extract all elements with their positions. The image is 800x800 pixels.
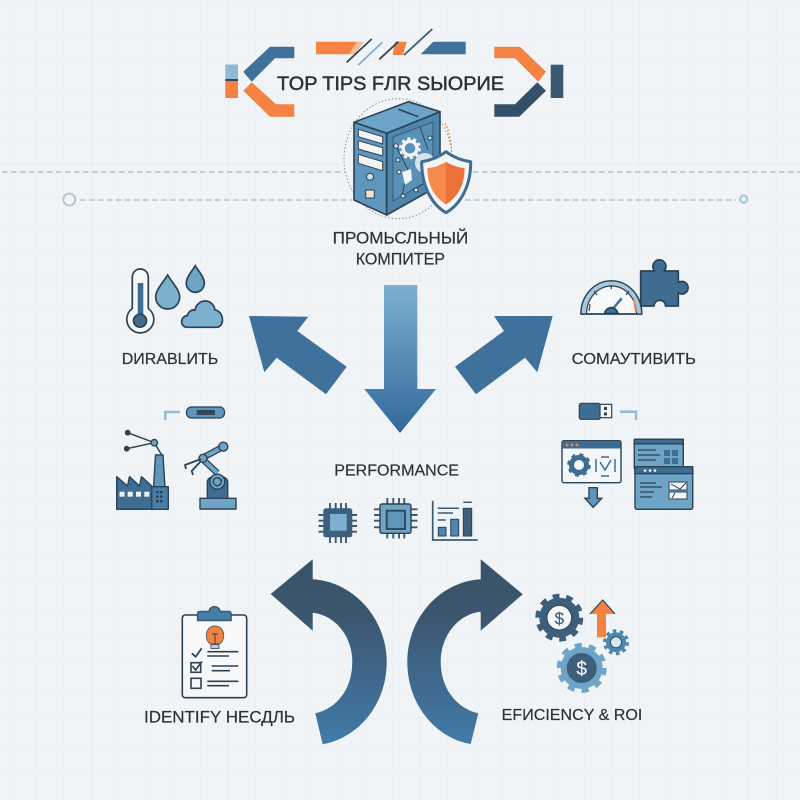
left end bar — [225, 64, 238, 98]
arrow: curved left — [271, 559, 387, 744]
title text: TOP TIPS FЛR SЫОРИЕ — [277, 73, 504, 95]
icon: factory — [117, 430, 168, 509]
icon: thermometer, drops and cloud — [127, 266, 222, 333]
cloud — [182, 301, 222, 327]
top slashes and bars — [316, 29, 466, 65]
left bracket — [243, 47, 294, 117]
icon: processor chip light — [374, 498, 418, 538]
icon: robot arm — [185, 442, 236, 509]
label: efficiency and ROI: EFИCIENCY & ROI — [502, 707, 642, 724]
label: industrial computer: ПРОМЬСЛЬНЫЙ — [333, 228, 468, 247]
title banner — [225, 29, 563, 117]
dashed connector lines — [2, 172, 800, 206]
shield — [422, 152, 471, 213]
circuit panel — [393, 122, 435, 201]
label: industrial computer: КОМПИТЕР — [356, 249, 445, 268]
arrow: curved right — [407, 559, 523, 744]
thermometer — [127, 269, 154, 333]
arrow: up right — [455, 316, 553, 394]
icon: software windows — [562, 439, 693, 509]
icon: gauge and puzzle piece — [581, 260, 688, 314]
download arrow — [585, 488, 602, 507]
water drops — [156, 266, 204, 309]
arrow: central down — [364, 285, 436, 433]
label: performance: PERFORMANCE — [334, 463, 459, 480]
gauge — [581, 281, 642, 314]
back window — [634, 439, 683, 470]
label: identify needs: IDENTIFY НЕСДЛЬ — [144, 709, 295, 727]
arrow: up left — [249, 316, 347, 394]
checklist — [191, 648, 238, 688]
settings window — [562, 441, 621, 483]
front window — [635, 467, 693, 509]
light bulb — [206, 626, 224, 648]
icon: clipboard checklist — [182, 607, 247, 698]
icon: ruggedised drive left — [165, 407, 224, 420]
right end bar — [551, 65, 563, 98]
icon: industrial computer with shield — [344, 99, 471, 219]
label: durability: DИRABLИТЬ — [122, 351, 218, 368]
clip — [198, 607, 231, 620]
server tower — [354, 102, 440, 215]
icon: gears and growth arrow — [538, 597, 627, 690]
icon: bar chart — [433, 501, 478, 540]
gear light: $ — [576, 659, 587, 680]
growth arrow — [590, 600, 615, 637]
icon: processor chip dark — [318, 503, 357, 543]
puzzle piece — [641, 260, 688, 306]
icon: USB stick right — [579, 403, 636, 420]
label: compatibility: СОМАУТИВИТЬ — [572, 351, 696, 368]
gear small — [605, 631, 627, 653]
label: industrial computer — [333, 228, 468, 268]
gear dark: $ — [555, 609, 565, 628]
right bracket — [494, 47, 546, 117]
